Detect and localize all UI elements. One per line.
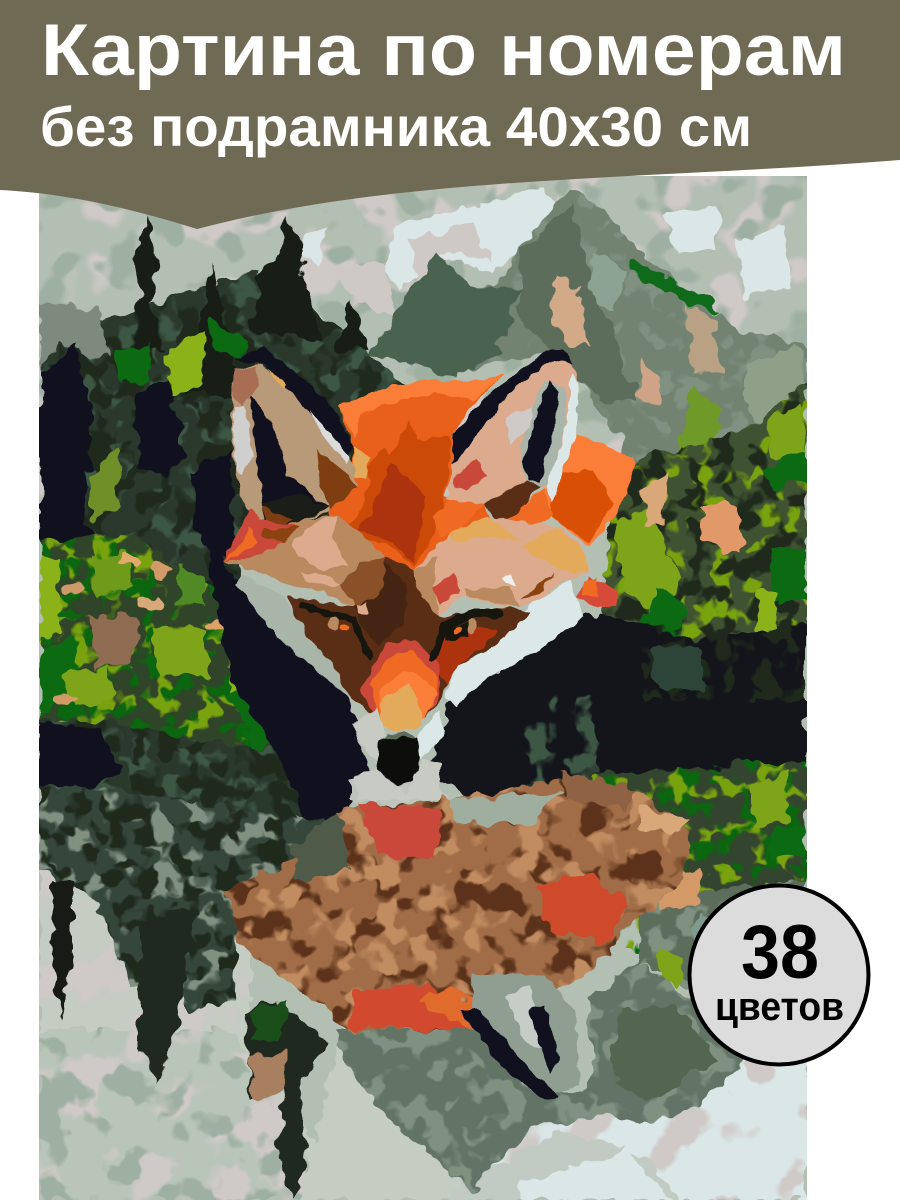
banner	[0, 0, 900, 229]
left forest	[39, 216, 406, 818]
muzzle	[360, 640, 440, 732]
title: Картина по номерам	[41, 10, 846, 91]
badge: number of colours	[690, 886, 868, 1064]
right ear	[447, 350, 578, 523]
badge: number of colours: цветов	[715, 985, 844, 1029]
right forest	[430, 380, 807, 800]
subtitle: без подрамника 40х30 см	[40, 95, 752, 158]
fox head	[223, 347, 633, 800]
lower pale reflection	[39, 870, 807, 1200]
dark tree columns	[39, 342, 96, 543]
right cheek	[413, 517, 617, 617]
eyes	[302, 605, 500, 658]
head fur	[328, 375, 633, 570]
neck fur right	[445, 580, 583, 707]
lower right foliage	[591, 758, 807, 990]
black areas beside fox	[39, 525, 368, 830]
sky and clouds at top	[39, 176, 807, 506]
left cheek	[223, 508, 393, 607]
badge: number of colours: 38	[741, 910, 819, 995]
reflected dark trees	[39, 785, 345, 1200]
neck fur left	[235, 573, 348, 697]
reflected mountains	[335, 960, 745, 1190]
reflected ear	[460, 975, 580, 1100]
left ear	[232, 347, 357, 533]
mountains	[370, 188, 807, 480]
dark band right	[430, 612, 807, 800]
nose and muzzle fur	[353, 708, 443, 800]
bright foliage left	[165, 330, 205, 392]
panel: fox painting	[39, 176, 807, 1200]
fox reflection	[228, 770, 692, 1030]
face center	[287, 557, 530, 720]
